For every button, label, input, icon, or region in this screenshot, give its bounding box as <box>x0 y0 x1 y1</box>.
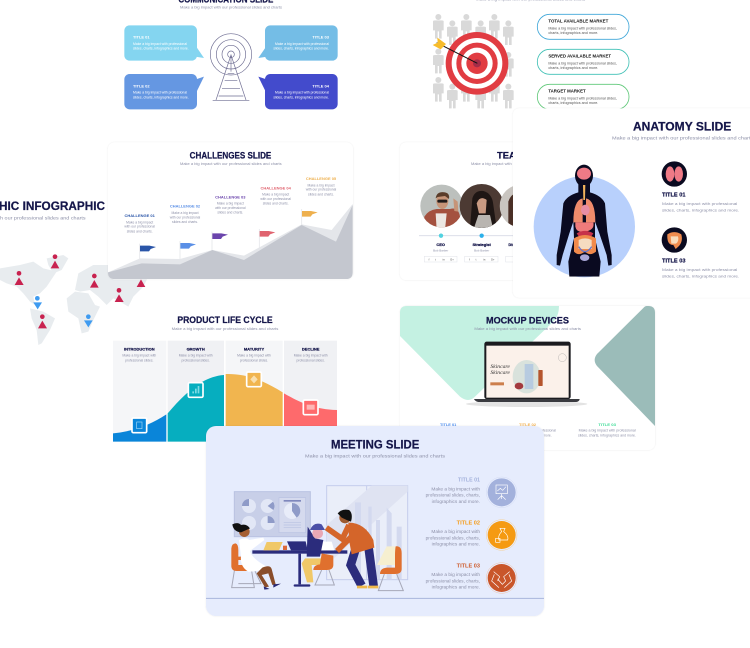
icon: decline <box>303 400 318 415</box>
icon: intestine <box>662 227 687 253</box>
heading: CHALLENGES SLIDE <box>190 150 271 160</box>
pill: served available market: Make a big impact with professional slides, <box>548 61 617 65</box>
subtitle: Make a big impact with our professional slides and charts <box>474 326 581 331</box>
subtitle: Make a big impact with our professional slides and charts <box>612 136 750 142</box>
illustration: standing man <box>326 510 378 588</box>
text: challenge 04: Make a big impact <box>262 193 289 197</box>
text: challenge 04: slides and charts. <box>263 202 289 206</box>
icon: growth <box>188 383 203 397</box>
icon: presentation <box>486 477 517 508</box>
pill: served available market: charts, infographics and more. <box>548 66 598 70</box>
card <box>513 108 750 298</box>
floor line <box>206 597 544 600</box>
illustration: left chair <box>231 543 261 588</box>
member: third: Director <box>508 242 524 247</box>
heading: TEAM SLIDE <box>497 150 554 160</box>
text: challenge 05: CHALLENGE 05 <box>306 176 337 181</box>
heading: geographic infographic: HIC INFOGRAPHIC <box>0 199 105 213</box>
member: CEO: Bob Barber <box>433 249 448 253</box>
text: title 03: TITLE 03 <box>457 563 480 569</box>
text: title 03: Make a big impact with professional <box>662 267 737 272</box>
text: title 02: TITLE 02 <box>457 520 480 526</box>
icon: maturity <box>247 372 261 387</box>
text: title 03: infographics and more. <box>432 585 480 590</box>
column: decline: Make a big impact with <box>294 354 328 358</box>
text: challenge 02: Make a big impact <box>171 211 199 215</box>
column: introduction: Make a big impact with <box>122 354 156 358</box>
subtitle: Make a big impact with our professional slides and charts <box>180 161 282 166</box>
card <box>400 142 540 280</box>
callout: title 01: Make a big impact with professional <box>133 42 187 46</box>
text: title 03: TITLE 03 <box>598 422 617 427</box>
people crowd <box>433 14 514 108</box>
column: maturity: professional slides. <box>240 358 268 362</box>
callout: title 03: Make a big impact with professional <box>275 42 329 46</box>
callout: title 01 <box>124 25 204 61</box>
callout: title 04: slides, charts, infographics and more. <box>273 95 329 99</box>
column: decline: professional slides. <box>297 358 325 362</box>
social links: third <box>506 256 539 262</box>
text: title 02: professional slides, charts, <box>426 535 480 540</box>
mountain chart <box>108 204 353 279</box>
map pins: red <box>15 254 145 328</box>
text: challenge 03: with our professional <box>215 206 246 210</box>
panel: challenges slide <box>108 142 353 279</box>
illustration: laptops <box>263 541 334 550</box>
callout: title 04 <box>258 74 338 109</box>
member: strategist: Bob Barber <box>474 249 489 253</box>
pill: total available market: TOTAL AVAILABLE MARKET <box>548 19 609 24</box>
text: challenge 05: slides and charts. <box>308 192 334 196</box>
callout: title 03: slides, charts, infographics and more. <box>273 47 329 51</box>
laptop mockup: Skincare <box>490 370 510 376</box>
icon: target with arrow <box>433 32 508 95</box>
social links: CEO <box>424 256 457 262</box>
text: title 03 body: slides, charts, infographics and more. <box>578 434 636 438</box>
text: title 03: slides, charts, infographics and more. <box>662 273 739 278</box>
text: title 02 body <box>537 429 556 438</box>
callout: title 02: TITLE 02 <box>133 83 150 88</box>
flag 03 <box>212 232 228 250</box>
illustration: meeting table <box>252 550 347 587</box>
card <box>400 306 655 450</box>
text: challenge 01 <box>124 213 156 233</box>
column: growth: professional slides. <box>182 358 210 362</box>
panel: team slide <box>400 142 513 280</box>
column: growth: GROWTH <box>187 346 205 351</box>
text: challenge 03: Make a big impact <box>217 202 244 206</box>
text: challenge 03: slides and charts. <box>217 211 243 215</box>
column: maturity: MATURITY <box>244 346 264 351</box>
social links: strategist: in <box>483 257 486 261</box>
subtitle: Make a big impact with our professional slides and charts <box>180 5 282 10</box>
text: challenge 04: CHALLENGE 04 <box>260 185 292 190</box>
photo: CEO <box>420 184 462 228</box>
illustration: seated person in yellow <box>302 524 334 585</box>
text: title 01: TITLE 01 <box>458 478 480 484</box>
market size slide <box>433 0 629 109</box>
text: challenge 02: CHALLENGE 02 <box>170 204 201 209</box>
illustration: human body <box>557 165 612 277</box>
social links: CEO: t <box>435 257 436 261</box>
callout: title 03: TITLE 03 <box>312 35 330 40</box>
heading: ANATOMY SLIDE <box>633 120 731 134</box>
callout: title 02: Make a big impact with professional <box>133 91 187 95</box>
text: title 03 body <box>578 429 636 438</box>
pill: target market <box>537 84 629 109</box>
text: title 03: professional slides, charts, <box>426 578 480 583</box>
text: title 02 <box>426 520 481 547</box>
text: title 02: TITLE 02 <box>519 422 537 427</box>
text: title 01: Make a big impact with professional <box>662 201 737 206</box>
social links: strategist: f <box>469 257 470 261</box>
social links: CEO: f <box>429 257 430 261</box>
geographic infographic slide <box>0 199 148 345</box>
pill: total available market: charts, infographics and more. <box>548 31 598 35</box>
text: title 01: infographics and more. <box>432 499 480 504</box>
panel: mockup devices <box>400 306 655 450</box>
text: title 01: slides, charts, infographics and more. <box>662 207 739 212</box>
icon: brain <box>662 161 687 187</box>
photo: strategist <box>460 184 502 228</box>
flag 05 <box>302 209 318 225</box>
text: title 02: infographics and more. <box>432 542 480 547</box>
text: challenge 01: with our professional <box>124 225 155 229</box>
social links: strategist: G+ <box>491 257 495 261</box>
heading: MOCKUP DEVICES <box>486 315 569 325</box>
pill: served available market: SERVED AVAILABLE MARKET <box>548 54 611 59</box>
icon: money bag <box>486 520 517 550</box>
panel: meeting slide <box>206 426 544 616</box>
text: title 02 body: professional <box>538 429 556 433</box>
column: maturity <box>226 341 283 442</box>
text: challenge 04 <box>260 185 292 206</box>
illustration: presentation board <box>234 492 310 537</box>
pill: total available market <box>537 14 629 39</box>
flag 01 <box>140 244 156 262</box>
social links: CEO: G+ <box>450 257 454 261</box>
text: title 02: Make a big impact with <box>431 529 481 534</box>
text: challenge 02 <box>170 204 201 224</box>
column: introduction <box>113 341 166 442</box>
column: introduction: INTRODUCTION <box>124 346 155 351</box>
column: decline: DECLINE <box>302 346 320 351</box>
text: challenge 05: with our professional <box>306 188 337 192</box>
icon: radio tower <box>210 34 252 100</box>
text: challenge 03: CHALLENGE 03 <box>215 194 246 199</box>
laptop mockup: Skincare <box>490 364 510 370</box>
text: title 01 <box>426 478 481 504</box>
laptop mockup <box>466 342 587 407</box>
text: title 03: TITLE 03 <box>662 259 686 265</box>
callout: title 04: TITLE 04 <box>312 83 330 88</box>
text: title 03 body: Make a big impact with professional <box>579 429 636 433</box>
social links: strategist: t <box>476 257 477 261</box>
text: title 01: TITLE 01 <box>662 193 686 199</box>
text: challenge 05 <box>306 176 337 196</box>
text: challenge 01: slides and charts. <box>127 229 153 233</box>
callout: title 01: TITLE 01 <box>133 35 150 40</box>
callout: title 03 <box>258 25 338 61</box>
icon: handshake <box>486 563 517 593</box>
column: maturity: Make a big impact with <box>237 354 271 358</box>
subtitle: h our professional slides and charts <box>0 216 86 222</box>
callout: title 02: slides, charts, infographics and more. <box>133 95 189 99</box>
timeline <box>419 233 542 238</box>
social links: CEO: in <box>443 257 445 261</box>
social links: strategist <box>465 256 498 262</box>
callout: title 04: Make a big impact with professional <box>275 91 329 95</box>
illustration: woman in white <box>232 523 281 590</box>
member: CEO: CEO <box>436 242 445 247</box>
decoration: mint shape <box>400 306 559 400</box>
flag 02 <box>180 241 196 259</box>
text: title 03 <box>662 259 739 278</box>
column: decline <box>284 341 337 442</box>
subtitle: Make a big impact with our professional slides and charts <box>172 326 278 331</box>
heading: MEETING SLIDE <box>331 438 419 452</box>
text: title 01: Make a big impact with <box>431 486 481 491</box>
text: challenge 01: Make a big impact <box>126 220 153 224</box>
text: challenge 03 <box>215 194 246 215</box>
column: introduction: professional slides. <box>125 358 154 362</box>
illustration: circle backdrop <box>534 176 635 277</box>
text: challenge 01: CHALLENGE 01 <box>124 213 156 218</box>
communication slide <box>124 0 338 109</box>
pill: target market: Make a big impact with professional slides, <box>548 96 617 100</box>
map pins: blue <box>33 296 93 327</box>
world map <box>0 255 148 345</box>
illustration: right chair <box>377 546 403 591</box>
pill: target market: TARGET MARKET <box>548 89 586 94</box>
card <box>108 142 353 279</box>
text: challenge 02: slides and charts. <box>172 220 198 224</box>
text: title 03: Make a big impact with <box>431 572 481 577</box>
callout: title 01: slides, charts, infographics and more. <box>133 47 189 51</box>
pill: total available market: Make a big impact with professional slides, <box>548 26 617 30</box>
member: CEO <box>433 242 448 253</box>
photo: third team member <box>500 186 513 226</box>
text: challenge 02: with our professional <box>170 215 201 219</box>
subtitle: Make a big impact with our professional slides and charts <box>471 161 573 166</box>
heading: PRODUCT LIFE CYCLE <box>177 315 273 325</box>
panel: anatomy slide <box>513 108 750 298</box>
text: title 01: TITLE 01 <box>440 422 457 427</box>
text: challenge 04: with our professional <box>260 197 291 201</box>
column: growth: Make a big impact with <box>179 354 213 358</box>
pill: target market: charts, infographics and more. <box>548 101 598 105</box>
pill: served available market <box>537 49 629 74</box>
member: strategist: Strategist <box>472 242 492 247</box>
illustration: window with city <box>327 486 408 580</box>
card <box>206 426 544 616</box>
member: strategist <box>472 242 492 253</box>
text: challenge 05: Make a big impact <box>307 183 335 187</box>
subtitle: Make a big impact with our professional slides and charts <box>305 453 446 459</box>
text: title 02 body: and more. <box>537 434 552 438</box>
flag 04 <box>259 229 275 248</box>
text: title 01 <box>662 193 739 212</box>
text: title 03 <box>426 563 481 590</box>
column: growth <box>168 341 224 442</box>
icon: introduction <box>132 418 147 433</box>
callout: title 02 <box>124 74 204 109</box>
text: title 01: professional slides, charts, <box>426 493 480 498</box>
panel: product life cycle <box>113 315 337 442</box>
decoration: teal shape <box>595 306 655 426</box>
